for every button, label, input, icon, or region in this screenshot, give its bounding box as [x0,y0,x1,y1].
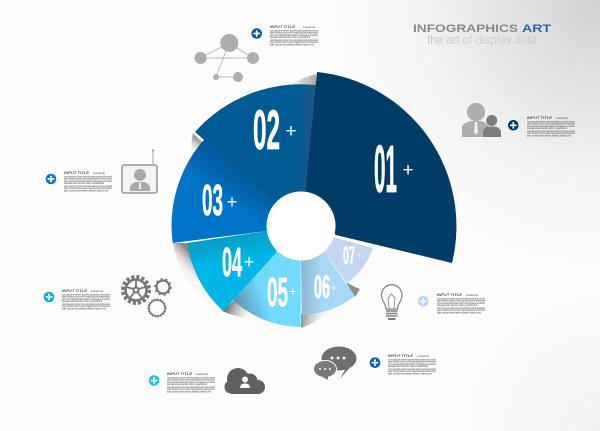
text block: video call: INPUT TITLE [64,170,89,175]
text block: people [527,115,575,137]
text block: chat: Lorem ipsum dolor sit amet consectetur adipiscing elit sed do eiusmod [388,358,436,362]
icon: cloud with person [224,368,265,394]
icon: video call screen [122,149,157,193]
text block: network: Lorem ipsum dolor sit amet consectetur adipiscing elit sed do eiusmod [270,30,318,32]
segment 07: 07 [343,242,355,270]
segment 06 [301,252,355,315]
text block: network: Lorem ipsum dolor sit amet consectetur adipiscing elit sed do eiusmod [270,39,318,42]
text block: video call: quis nostrud exercitation ullamco laboris nisi [64,189,108,192]
text block: network: INPUT TITLE [270,24,295,29]
text block: cloud: quis nostrud exercitation ullamco laboris nisi [167,390,211,393]
text block: cloud: quis nostrud exercitation ullamco laboris nisi ut aliquip ex ea commodo [167,381,215,384]
text block: light bulb: tempor incididunt ut labore et dolore magna aliqua enim ad minim veniam [437,309,485,312]
segment 04 [187,231,277,311]
text block: light bulb: Lorem ip [466,293,478,297]
text block: network: consequat duis aute irure dolor in reprehenderit [270,36,310,39]
text block: cloud: Lorem ip [196,372,208,376]
plus button: people [508,120,519,131]
segment 04: 04 [222,239,242,285]
text block: light bulb: INPUT TITLE [437,292,462,297]
plus button: video call [46,174,56,184]
text block: video call: tempor incididunt ut labore et dolore magna aliqua enim ad minim veniam [64,187,112,190]
icon: light bulb [382,285,402,319]
plus button: network [251,28,262,39]
text block: gears [62,288,110,310]
text block: gears: INPUT TITLE [62,288,87,293]
segment 03 [172,130,290,243]
pie chart [172,72,456,328]
text block: gears: consequat duis aute irure dolor in reprehenderit [62,300,102,303]
segment 07: + [356,250,362,262]
text block: chat: INPUT TITLE [388,353,413,358]
segment 02: + [285,121,297,142]
text block: light bulb: consequat duis aute irure dolor in reprehenderit [437,304,477,307]
text block: video call: tempor incididunt ut labore et dolore magna aliqua enim ad minim veniam [64,178,112,181]
text block: chat: consequat duis aute irure dolor in reprehenderit [388,365,428,368]
segment 01: 01 [374,132,397,207]
segment 03: 03 [202,176,223,225]
text block: gears: tempor incididunt ut labore et dolore magna aliqua enim ad minim veniam [62,296,110,299]
segment 06: + [330,281,338,295]
text block: people: Lorem ip [556,116,568,120]
icon: network [194,34,259,82]
text block: cloud: tempor incididunt ut labore et dolore magna aliqua enim ad minim veniam [167,379,215,382]
segment 06: 06 [314,269,330,305]
title: INFOGRAPHICS [413,23,518,35]
segment 01: + [402,160,414,181]
text block: cloud: INPUT TITLE [167,371,192,376]
text block: cloud: tempor incididunt ut labore et dolore magna aliqua enim ad minim veniam [167,388,215,391]
text block: video call: Lorem ip [93,171,105,175]
text block: people: quis nostrud exercitation ullamco laboris nisi [527,134,571,137]
text block: cloud: consequat duis aute irure dolor in reprehenderit [167,383,207,386]
text block: gears: Lorem ipsum dolor sit amet consectetur adipiscing elit sed do eiusmod [62,294,110,296]
text block: cloud: Lorem ipsum dolor sit amet consectetur adipiscing elit sed do eiusmod [167,376,215,380]
segment 03: + [227,192,237,212]
text block: video call: Lorem ipsum dolor sit amet consectetur adipiscing elit sed do eiusmod [64,185,112,188]
text block: network: tempor incididunt ut labore et dolore magna aliqua enim ad minim veniam [270,32,318,35]
segment 05: 05 [267,269,288,315]
text block: gears: Lorem ipsum dolor sit amet consectetur adipiscing elit sed do eiusmod [62,303,110,306]
text block: light bulb: tempor incididunt ut labore et dolore magna aliqua enim ad minim veniam [437,300,485,303]
text block: light bulb: Lorem ipsum dolor sit amet consectetur adipiscing elit sed do eiusmod [437,307,485,310]
text block: network: quis nostrud exercitation ullamco laboris nisi [270,43,314,46]
text block: chat: quis nostrud exercitation ullamco laboris nisi ut aliquip ex ea commodo [388,363,436,366]
text block: network: tempor incididunt ut labore et dolore magna aliqua enim ad minim veniam [270,41,318,44]
text block: network: quis nostrud exercitation ullamco laboris nisi ut aliquip ex ea commodo [270,34,318,37]
icon: gears [123,277,171,317]
segment 02: 02 [253,98,280,161]
icon: people [462,103,501,137]
text block: video call: quis nostrud exercitation ullamco laboris nisi ut aliquip ex ea commodo [64,180,112,183]
text block: people: consequat duis aute irure dolor in reprehenderit [527,127,567,130]
text block: gears: Lorem ip [91,289,103,293]
text block: video call: consequat duis aute irure dolor in reprehenderit [64,182,104,185]
text block: chat: quis nostrud exercitation ullamco laboris nisi [388,372,432,375]
segment 05 [233,252,301,327]
text block: network [270,24,318,46]
icon: chat bubbles [314,346,356,380]
text block: gears: quis nostrud exercitation ullamco laboris nisi [62,307,106,310]
plus button: gears [44,292,54,302]
segment 05: + [289,283,297,299]
plus button: cloud [149,375,159,386]
text block: gears: quis nostrud exercitation ullamco laboris nisi ut aliquip ex ea commodo [62,298,110,301]
text block: chat: Lorem ipsum dolor sit amet consectetur adipiscing elit sed do eiusmod [388,368,436,371]
text block: light bulb: Lorem ipsum dolor sit amet consectetur adipiscing elit sed do eiusmod [437,298,485,300]
segment 04: + [244,252,254,272]
text block: chat [388,353,436,375]
title: ART [522,23,551,35]
segment shadows [173,74,360,328]
segment 01 [305,72,456,263]
text block: video call [64,170,112,192]
subtitle: the art of display data [427,33,537,47]
text block: light bulb [437,292,485,314]
title [413,23,551,35]
plus button: chat [370,357,380,368]
text block: light bulb: quis nostrud exercitation ullamco laboris nisi ut aliquip ex ea commodo [437,302,485,305]
text block: chat: Lorem ip [417,354,429,358]
segment 07 [324,237,373,283]
text block: cloud [167,371,215,393]
segment 02 [195,84,316,200]
text block: light bulb: quis nostrud exercitation ullamco laboris nisi [437,311,481,314]
text block: network: Lorem ip [303,25,315,29]
text block: people: INPUT TITLE [527,115,552,120]
text block: cloud: Lorem ipsum dolor sit amet consectetur adipiscing elit sed do eiusmod [167,386,215,389]
text block: gears: tempor incididunt ut labore et dolore magna aliqua enim ad minim veniam [62,305,110,308]
text block: chat: tempor incididunt ut labore et dolore magna aliqua enim ad minim veniam [388,370,436,373]
centre hole [266,192,336,260]
plus button: light bulb [418,296,429,307]
text block: video call: Lorem ipsum dolor sit amet consectetur adipiscing elit sed do eiusmod [64,176,112,178]
text block: chat: tempor incididunt ut labore et dolore magna aliqua enim ad minim veniam [388,361,436,364]
